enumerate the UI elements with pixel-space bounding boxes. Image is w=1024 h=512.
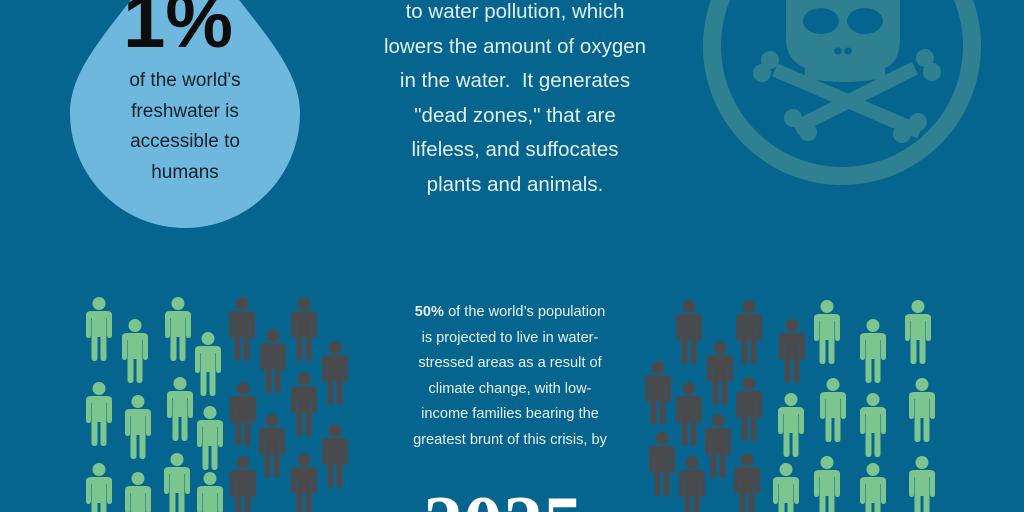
text: pollution description: "dead zones," that are	[414, 104, 616, 127]
text: population statistic: stressed areas as a result of	[418, 355, 602, 371]
text: drop caption: of the world's	[129, 70, 241, 91]
text: pollution description: plants and animals.	[427, 173, 603, 196]
text: drop caption: accessible to	[130, 131, 240, 152]
text: pollution description	[384, 0, 646, 196]
text: pollution description: lowers the amount of oxygen	[384, 35, 646, 58]
right people group	[645, 300, 935, 512]
text: pollution description: to water pollution, which	[406, 0, 624, 23]
text: population statistic: greatest brunt of this crisis, by	[413, 432, 607, 448]
text: population statistic: climate change, with low-	[428, 381, 592, 397]
text: population statistic: income families bearing the	[421, 406, 599, 422]
text: population statistic: 50% of the world’s population	[415, 304, 605, 320]
text: population statistic	[413, 304, 607, 448]
text: drop caption: freshwater is	[131, 100, 239, 122]
icon: skull and crossbones in circle	[712, 0, 972, 176]
text: drop caption: humans	[151, 162, 219, 182]
text: pollution description: lifeless, and suffocates	[411, 138, 619, 161]
text: drop caption	[129, 70, 241, 182]
icon: water drop	[70, 0, 300, 228]
text: pollution description: in the water. It generates	[400, 69, 630, 92]
left people group	[86, 297, 348, 512]
text: population statistic: is projected to live in water-	[422, 330, 598, 346]
